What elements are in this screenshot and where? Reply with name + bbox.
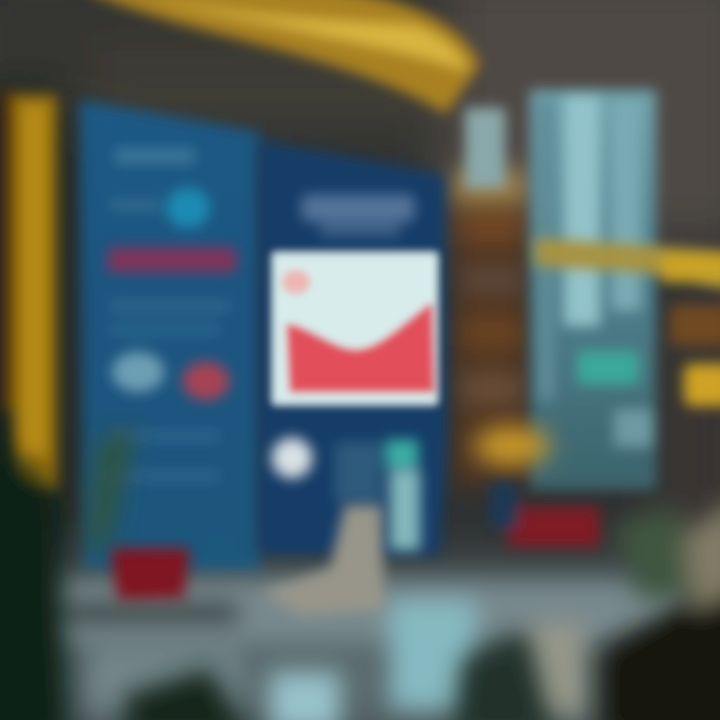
icons below chart [272, 438, 420, 550]
right wall shelf [665, 305, 720, 400]
left yellow column [0, 90, 57, 490]
panel: left blue [80, 100, 260, 572]
chart card [272, 252, 438, 405]
paper object [262, 505, 384, 615]
chart marker [282, 270, 310, 294]
glass column [530, 90, 656, 490]
plants [0, 425, 720, 720]
right yellow light [684, 364, 720, 406]
ceiling arc: yellow [78, 0, 480, 114]
yellow band [535, 238, 720, 290]
window above shelves [465, 108, 505, 188]
card background [272, 252, 438, 405]
red bowls [110, 482, 600, 600]
right brown shelves [452, 170, 530, 485]
panel: dark blue [258, 140, 447, 555]
yellow lights [474, 426, 550, 466]
heading blur on dark panel [302, 195, 414, 236]
red area chart [287, 303, 434, 392]
panel details: left blue text blurs [108, 148, 236, 482]
counter reflections [60, 582, 680, 720]
